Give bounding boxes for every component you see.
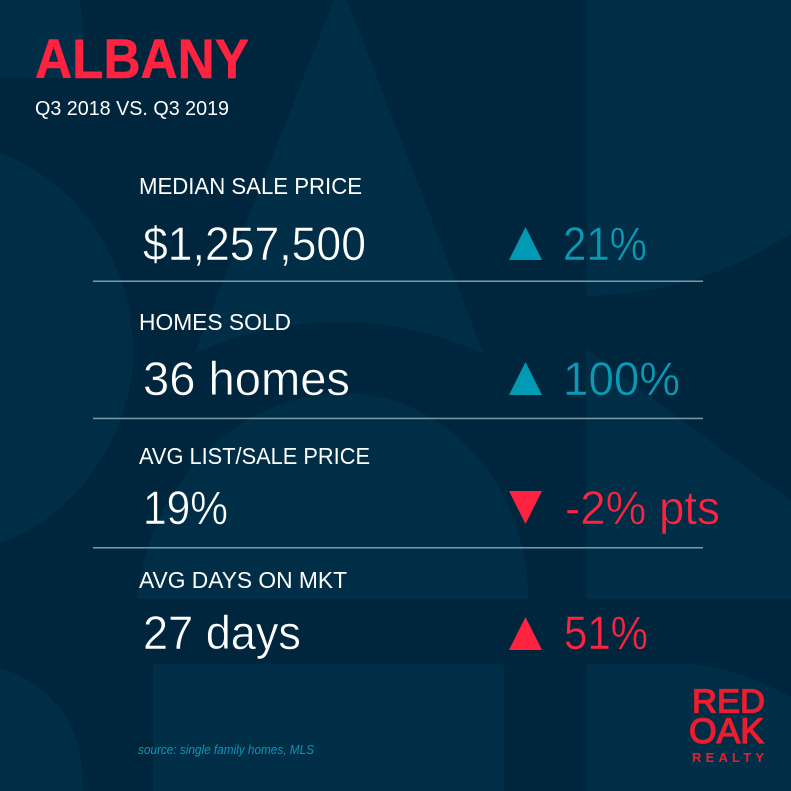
icon: up arrow teal (509, 362, 542, 395)
source note: source: single family homes, MLS (138, 743, 315, 757)
panel: average list to sale price (139, 443, 720, 534)
change: -2% pts (565, 481, 720, 534)
panel: homes sold (139, 309, 680, 405)
logo: Red Oak Realty: RED (692, 684, 765, 721)
logo: Red Oak Realty (689, 684, 765, 765)
label: MEDIAN SALE PRICE (139, 173, 362, 199)
value: 27 days (143, 606, 301, 659)
value: $1,257,500 (143, 217, 366, 270)
icon: up arrow red (509, 617, 542, 650)
label: HOMES SOLD (139, 309, 291, 335)
change: 100% (563, 352, 680, 405)
panel: median sale price (139, 173, 647, 270)
icon: up arrow teal (509, 227, 542, 260)
logo: Red Oak Realty: OAK (689, 711, 764, 751)
panel: average days on market (139, 567, 648, 659)
title: ALBANY (35, 27, 249, 90)
icon: down arrow red (509, 491, 542, 524)
change: 21% (563, 217, 647, 270)
value: 19% (143, 481, 228, 534)
label: AVG LIST/SALE PRICE (139, 443, 370, 469)
value: 36 homes (143, 352, 350, 405)
label: AVG DAYS ON MKT (139, 567, 347, 593)
change: 51% (564, 606, 648, 659)
subtitle: Q3 2018 VS. Q3 2019 (35, 98, 229, 120)
logo: Red Oak Realty: REALTY (692, 750, 764, 765)
